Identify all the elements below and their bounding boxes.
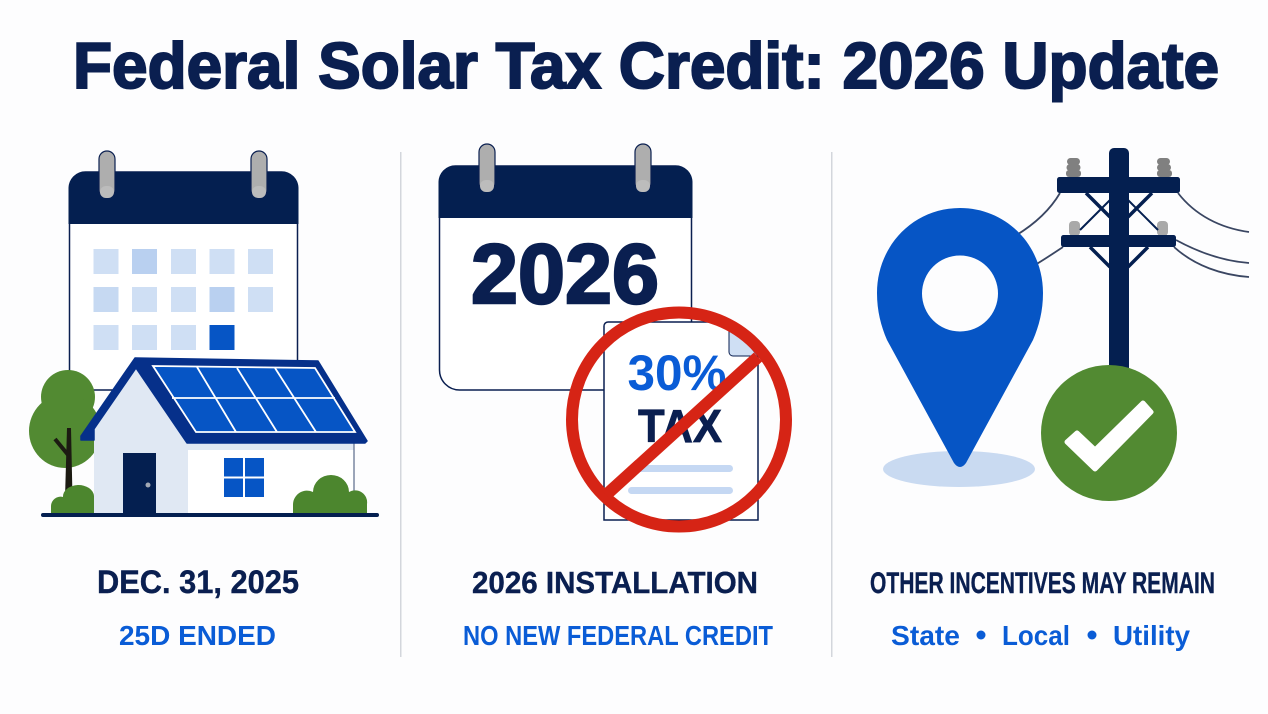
icon: green check badge	[1041, 365, 1177, 501]
icon: 2026 calendar: 2026	[471, 227, 659, 321]
title: Federal Solar Tax Credit: 2026 Update	[73, 29, 1219, 102]
panel: 2026 installation	[438, 144, 786, 651]
panel: other incentives	[870, 148, 1249, 651]
icon: bushes	[51, 475, 367, 513]
panel: Dec. 31, 2025	[29, 151, 379, 651]
icon: location pin	[877, 208, 1043, 467]
icon: house with solar panels	[81, 358, 367, 513]
icon: 2026 calendar	[438, 144, 692, 390]
label: 2026 installation: 2026 INSTALLATION	[472, 565, 758, 600]
icon: location pin shadow	[883, 451, 1035, 487]
label: state local utility	[891, 620, 1190, 651]
icon: tax document: 30%	[628, 345, 726, 401]
label: state local utility: Utility	[1113, 620, 1190, 651]
icon: tax document	[604, 322, 758, 520]
icon: calendar with date squares	[68, 151, 298, 390]
icon: red prohibition sign	[572, 312, 786, 526]
label: state local utility: State	[891, 620, 960, 651]
icon: tax document: TAX	[638, 400, 722, 452]
ground line	[41, 513, 379, 517]
icon: tree	[29, 370, 101, 498]
label: state local utility: Local	[1002, 620, 1070, 651]
label: no new federal credit: NO NEW FEDERAL CREDIT	[463, 620, 773, 651]
icon: utility pole	[1015, 148, 1249, 372]
label: date: DEC. 31, 2025	[97, 564, 299, 600]
label: 25D ended: 25D ENDED	[119, 620, 276, 651]
